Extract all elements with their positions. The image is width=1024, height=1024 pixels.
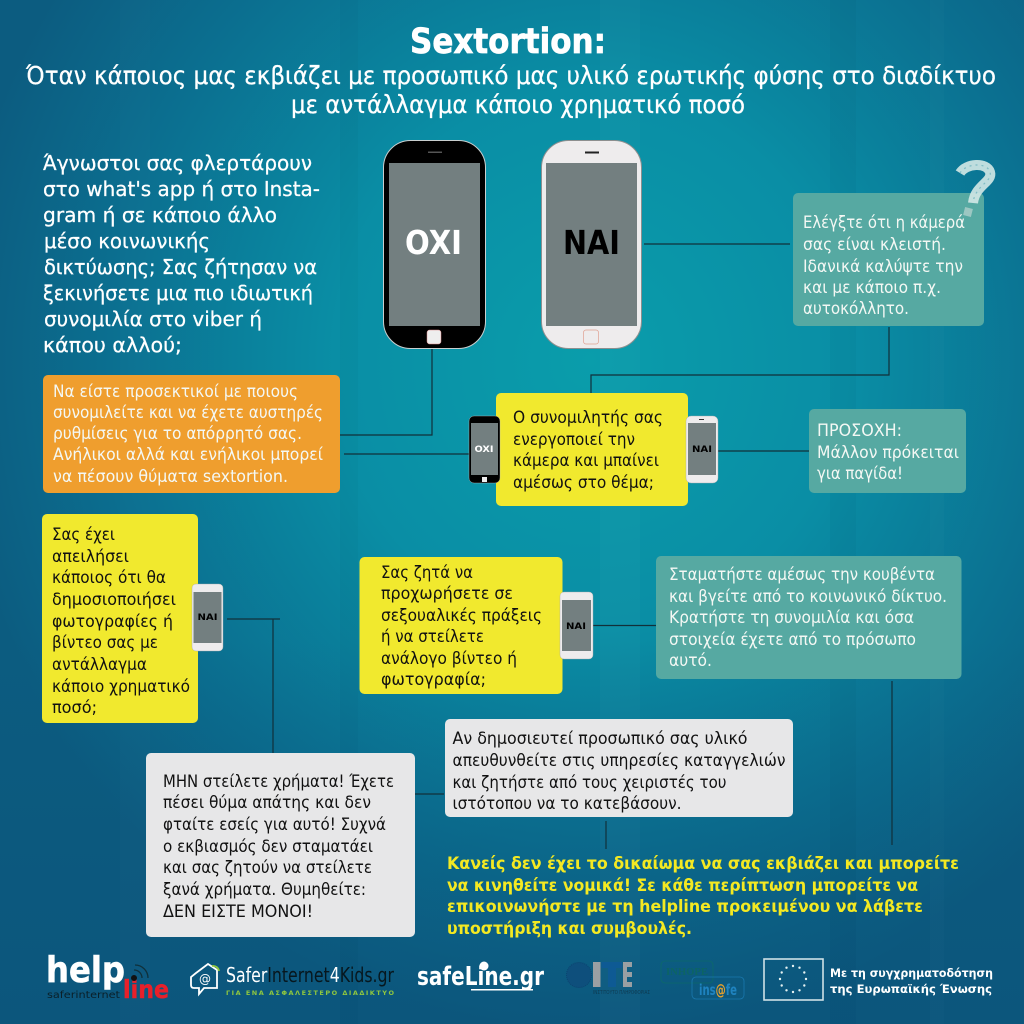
subtitle bbox=[25, 61, 996, 119]
privacy advice text: συνομιλείτε και να έχετε αυστηρές bbox=[53, 403, 323, 423]
do not send money text bbox=[163, 772, 394, 922]
logo: SaferInternet4Kids: SaferInternet4Kids.gr bbox=[226, 963, 395, 987]
camera question text: αμέσως στο θέμα; bbox=[513, 473, 654, 493]
panel: report content bbox=[445, 719, 793, 817]
title: Sextortion: bbox=[410, 22, 606, 62]
logo: helpline: help bbox=[46, 950, 125, 991]
do not send money text: ΔΕΝ ΕΙΣΤΕ ΜΟΝΟΙ! bbox=[163, 902, 313, 922]
EU co-funding text: Με τη συγχρηματοδότηση bbox=[830, 966, 993, 980]
logo: EU flag bbox=[764, 959, 823, 1000]
warning text: ΠΡΟΣΟΧΗ: bbox=[817, 421, 902, 441]
logo: ITE: ΙΝΣΤΙΤΟΥΤΟ ΠΛΗΡΟΦΟΡΙΑΣ bbox=[593, 990, 650, 996]
sexual acts question text: φωτογραφία; bbox=[381, 670, 486, 690]
large phone: NAI bbox=[542, 140, 642, 348]
camera advice text: αυτοκόλλητο. bbox=[803, 299, 909, 319]
logo: SaferInternet4Kids: ΓΙΑ ΕΝΑ ΑΣΦΑΛΕΣΤΕΡΟ ΔΙΑΔΙΚΤΥΟ bbox=[226, 989, 394, 997]
do not send money text: φταίτε εσείς για αυτό! Συχνά bbox=[163, 815, 386, 835]
camera question text bbox=[513, 408, 663, 493]
panel: orange privacy advice bbox=[43, 375, 340, 493]
threat question text: κάποιο χρηματικό bbox=[52, 677, 190, 697]
camera question text: κάμερα και μπαίνει bbox=[513, 451, 659, 471]
intro question text: κάπου αλλού; bbox=[43, 333, 182, 357]
logo: helpline: saferinternet bbox=[47, 990, 120, 1001]
logo: safeLine: safeLine.gr bbox=[417, 962, 544, 992]
sexual acts question text: ή να στείλετε bbox=[381, 627, 484, 647]
camera advice text: Ελέγξτε ότι η κάμερά bbox=[803, 213, 965, 233]
closing legal message: να κινηθείτε νομικά! Σε κάθε περίπτωση μπορείτε να bbox=[447, 876, 918, 895]
warning text bbox=[817, 421, 959, 484]
small phone: NAI threat: NAI bbox=[198, 613, 218, 623]
sexual acts question text: προχωρήσετε σε bbox=[381, 584, 513, 604]
intro question text: δικτύωσης; Σας ζήτησαν να bbox=[44, 255, 317, 279]
stop conversation text bbox=[669, 565, 947, 671]
threat question text: ποσό; bbox=[52, 698, 97, 718]
logo: insafe bbox=[692, 977, 744, 999]
camera advice text: σας είναι κλειστή. bbox=[803, 235, 946, 255]
panel: threat question bbox=[42, 514, 198, 723]
camera advice text bbox=[803, 213, 965, 319]
logo: SaferInternet4Kids bbox=[191, 963, 395, 997]
intro question text bbox=[43, 151, 320, 357]
closing legal message: υποστήριξη και συμβουλές. bbox=[447, 919, 692, 938]
large phone: OXI bbox=[384, 140, 486, 348]
threat question text: δημοσιοποιήσει bbox=[52, 590, 176, 610]
stop conversation text: Κρατήστε τη συνομιλία και όσα bbox=[669, 608, 914, 628]
large phone: OXI: OXI bbox=[405, 223, 462, 262]
do not send money text: ΜΗΝ στείλετε χρήματα! Έχετε bbox=[163, 772, 394, 792]
small phone: NAI acts: NAI bbox=[566, 622, 586, 632]
small phone: OXI: OXI bbox=[474, 445, 494, 455]
report content text: απευθυνθείτε στις υπηρεσίες καταγγελιών bbox=[452, 751, 786, 771]
intro question text: gram ή σε κάποιο άλλο bbox=[43, 203, 277, 227]
privacy advice text: ρυθμίσεις για το απόρρητό σας. bbox=[53, 424, 302, 444]
warning text: για παγίδα! bbox=[817, 464, 903, 484]
threat question text: αντάλλαγμα bbox=[52, 655, 147, 675]
report content text: και ζητήστε από τους χειριστές του bbox=[452, 773, 726, 793]
small phone: NAI bbox=[686, 416, 718, 483]
intro question text: μέσο κοινωνικής bbox=[44, 229, 210, 253]
stop conversation text: στοιχεία έχετε από το πρόσωπο bbox=[669, 630, 916, 650]
closing legal message: επικοινωνήστε με τη helpline προκειμένου να λάβετε bbox=[447, 897, 923, 916]
panel: stop conversation bbox=[656, 556, 962, 679]
report content text bbox=[452, 729, 786, 814]
do not send money text: πέσει θύμα απάτης και δεν bbox=[163, 793, 371, 813]
intro question text: συνομιλία στο viber ή bbox=[44, 307, 262, 331]
panel: camera advice bbox=[793, 193, 984, 326]
small phone: OXI bbox=[469, 416, 500, 483]
privacy advice text bbox=[53, 382, 323, 487]
threat question text: απειλήσει bbox=[52, 547, 129, 567]
threat question text: βίντεο σας με bbox=[52, 633, 158, 653]
logo: ITE bbox=[566, 962, 650, 996]
logo: INHOPE bbox=[661, 961, 713, 983]
privacy advice text: να πέσουν θύματα sextortion. bbox=[53, 467, 288, 487]
large phone: NAI: NAI bbox=[563, 223, 620, 262]
privacy advice text: Ανήλικοι αλλά και ενήλικοι μπορεί bbox=[53, 445, 323, 465]
threat question text: Σας έχει bbox=[52, 525, 115, 545]
logo: INHOPE: INHOPE bbox=[666, 966, 708, 978]
report content text: ιστότοπου να το κατεβάσουν. bbox=[452, 794, 682, 814]
icon: question mark bbox=[960, 165, 990, 216]
panel: camera question bbox=[496, 393, 688, 506]
camera advice text: και με κάποιο π.χ. bbox=[803, 278, 941, 298]
do not send money text: και σας ζητούν να στείλετε bbox=[163, 858, 372, 878]
logo: helpline bbox=[46, 950, 169, 1004]
small phone: NAI threat bbox=[192, 584, 223, 651]
do not send money text: ξανά χρήματα. Θυμηθείτε: bbox=[163, 880, 366, 900]
sexual acts question text: Σας ζητά να bbox=[381, 563, 473, 583]
stop conversation text: Σταματήστε αμέσως την κουβέντα bbox=[669, 565, 935, 585]
sexual acts question text: σεξουαλικές πράξεις bbox=[381, 606, 542, 626]
panel: sexual acts question bbox=[360, 557, 562, 694]
do not send money text: ο εκβιασμός δεν σταματάει bbox=[163, 837, 373, 857]
panel: warning trap bbox=[809, 409, 966, 493]
intro question text: Άγνωστοι σας φλερτάρουν bbox=[43, 151, 312, 175]
logo: insafe: ins@fe bbox=[699, 981, 737, 999]
camera question text: Ο συνομιλητής σας bbox=[513, 408, 663, 428]
connector lines bbox=[227, 244, 892, 849]
sexual acts question text bbox=[381, 563, 542, 690]
report content text: Αν δημοσιευτεί προσωπικό σας υλικό bbox=[452, 729, 748, 749]
threat question text bbox=[52, 525, 190, 718]
subtitle: με αντάλλαγμα κάποιο χρηματικό ποσό bbox=[291, 90, 745, 119]
logo: helpline: line bbox=[123, 975, 169, 1004]
small phone: NAI: NAI bbox=[692, 445, 712, 455]
EU co-funding text: της Ευρωπαϊκής Ένωσης bbox=[830, 982, 992, 996]
EU co-funding text bbox=[830, 966, 993, 996]
small phone: NAI acts bbox=[560, 592, 593, 659]
privacy advice text: Να είστε προσεκτικοί με ποιους bbox=[53, 382, 298, 402]
intro question text: ξεκινήσετε μια πιο ιδιωτική bbox=[43, 281, 313, 305]
warning text: Μάλλον πρόκειται bbox=[817, 443, 959, 463]
camera advice text: Ιδανικά καλύψτε την bbox=[803, 257, 963, 277]
threat question text: κάποιος ότι θα bbox=[52, 568, 166, 588]
stop conversation text: και βγείτε από το κοινωνικό δίκτυο. bbox=[669, 587, 947, 607]
stop conversation text: αυτό. bbox=[669, 651, 712, 671]
panel: do not send money bbox=[146, 753, 415, 937]
camera question text: ενεργοποιεί την bbox=[513, 430, 635, 450]
intro question text: στο what's app ή στο Insta- bbox=[43, 177, 320, 201]
closing legal message bbox=[447, 854, 959, 938]
closing legal message: Κανείς δεν έχει το δικαίωμα να σας εκβιάζει και μπορείτε bbox=[447, 854, 959, 873]
title bbox=[25, 22, 996, 119]
threat question text: φωτογραφίες ή bbox=[52, 612, 173, 632]
sexual acts question text: ανάλογο βίντεο ή bbox=[381, 649, 517, 669]
logo: SaferInternet4Kids: @ bbox=[199, 972, 211, 986]
